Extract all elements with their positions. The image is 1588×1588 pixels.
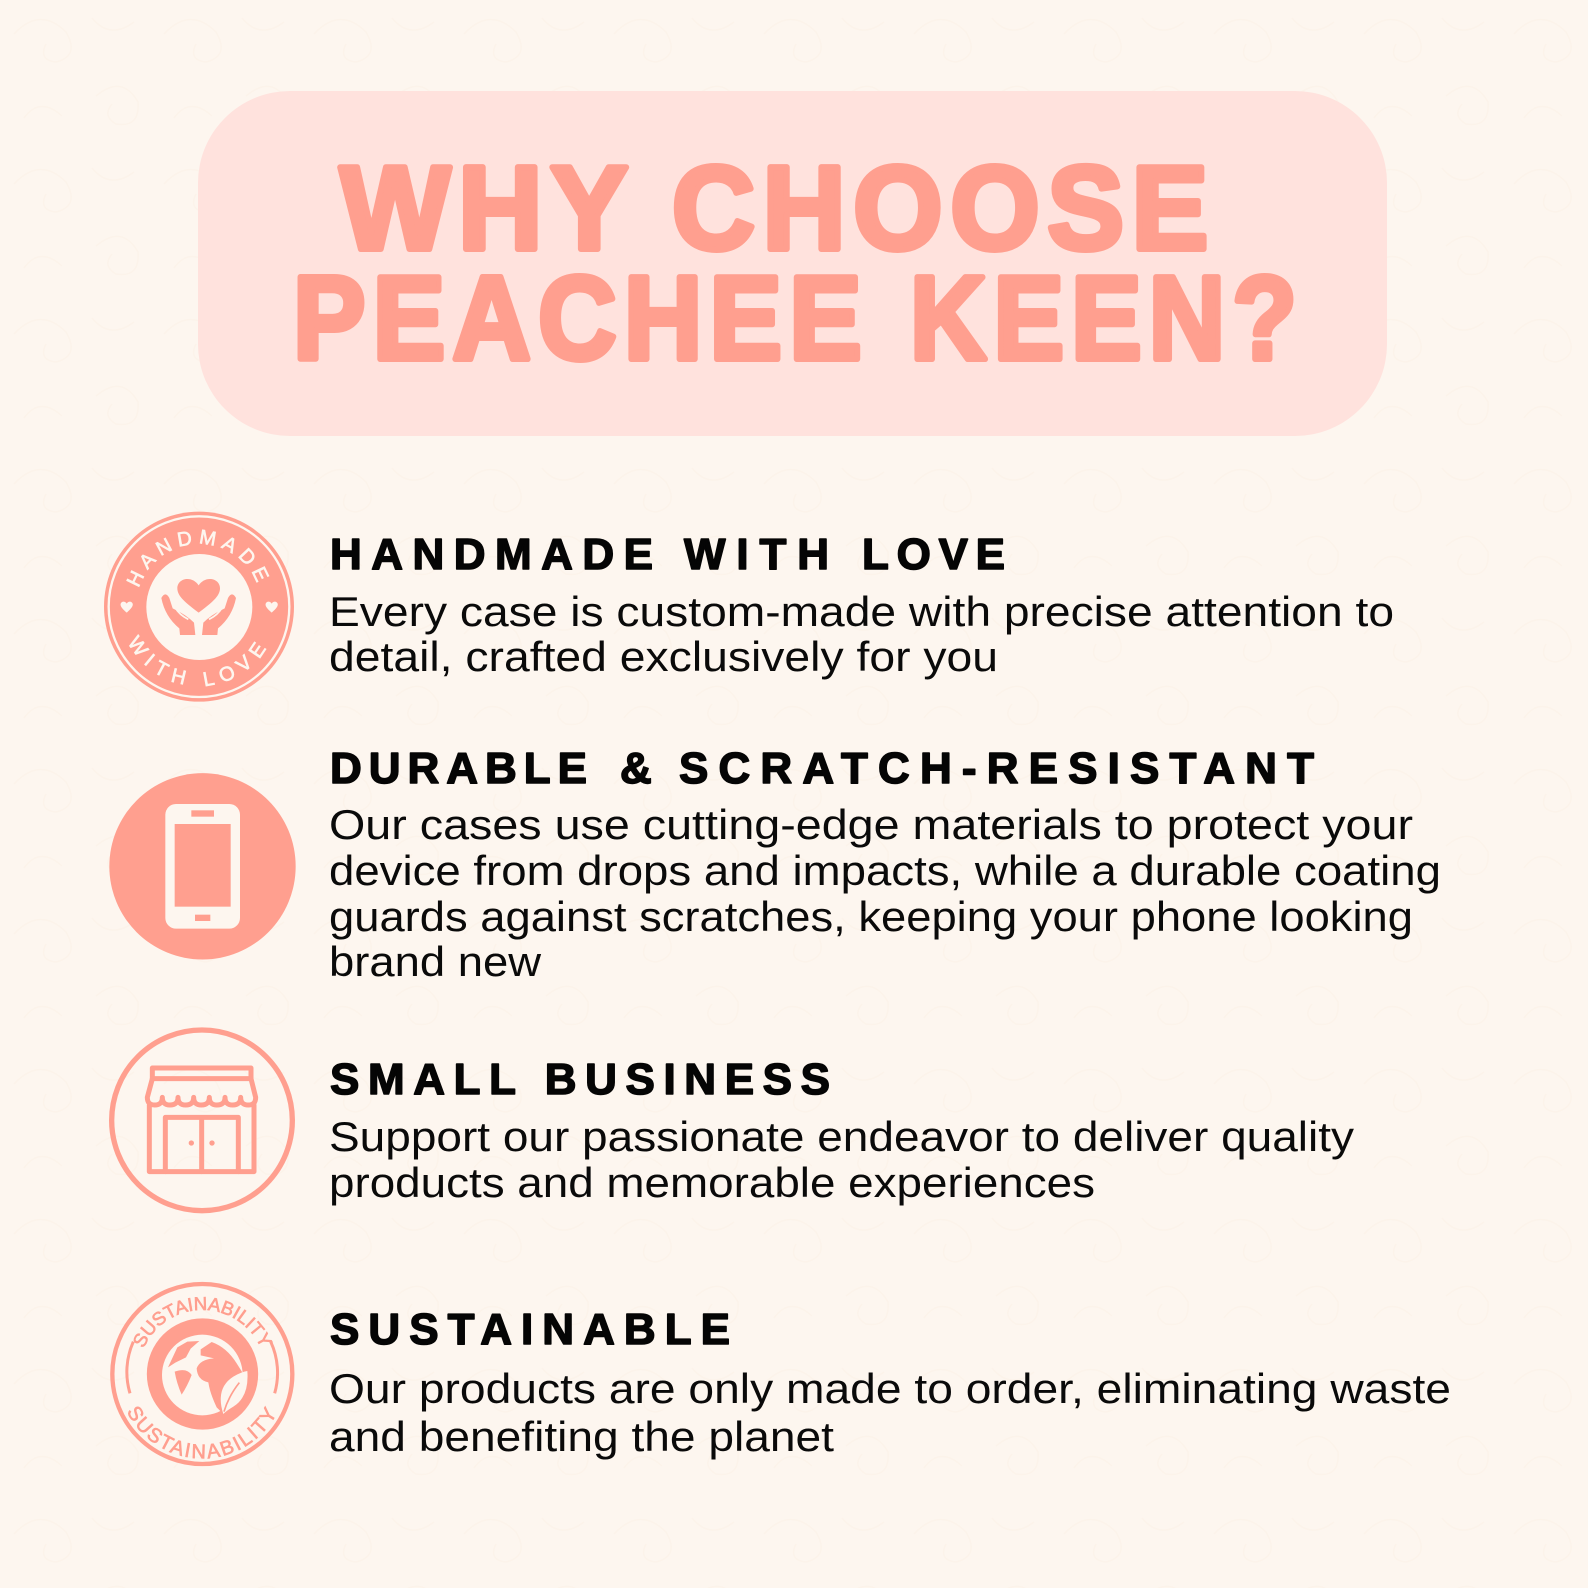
- text: durable description: [329, 801, 1441, 985]
- title banner: [198, 91, 1387, 436]
- text: durable description: Our cases use cutting-edge materials to protect your: [329, 801, 1413, 848]
- heading: durable and scratch-resistant: &: [620, 744, 652, 793]
- heading: handmade with love: LOVE: [862, 530, 1005, 579]
- item: durable and scratch-resistant: [329, 744, 1441, 985]
- item: handmade with love: [329, 530, 1394, 680]
- text: sustainable description: Our products are only made to order, eliminating waste: [329, 1365, 1451, 1412]
- heading: durable and scratch-resistant: [330, 744, 1314, 793]
- text: handmade description: Every case is custom-made with precise attention to: [329, 588, 1394, 635]
- icon: handmade with love badge: WITH LOVE: [129, 634, 266, 686]
- text: handmade description: [329, 588, 1394, 680]
- text: durable description: brand new: [329, 938, 542, 985]
- text: durable description: device from drops and impacts, while a durable coating: [329, 847, 1441, 894]
- icon: handmade with love badge: [104, 512, 294, 702]
- text: small business description: Support our passionate endeavor to deliver quality: [329, 1113, 1354, 1160]
- title: why choose peachee keen: WHY: [340, 142, 636, 275]
- icon: storefront: [112, 1030, 292, 1211]
- title: why choose peachee keen: CHOOSE: [672, 142, 1216, 275]
- text: handmade description: detail, crafted exclusively for you: [329, 633, 998, 680]
- icon: handmade with love badge: HANDMADE: [126, 529, 270, 588]
- item: sustainable: [329, 1305, 1451, 1460]
- text: sustainable description: and benefiting the planet: [329, 1413, 834, 1460]
- heading: sustainable: SUSTAINABLE: [330, 1305, 730, 1354]
- title: why choose peachee keen: PEACHEE: [293, 252, 869, 385]
- icon: sustainability globe badge: SUSTAINABILITY: [128, 1406, 275, 1459]
- title: why choose peachee keen: KEEN?: [910, 252, 1304, 385]
- text: sustainable description: [329, 1365, 1451, 1460]
- heading: handmade with love: HANDMADE: [330, 530, 653, 579]
- heading: small business: SMALL BUSINESS: [330, 1055, 830, 1104]
- title: why choose peachee keen: [293, 142, 1304, 385]
- icon: sustainability globe badge: SUSTAINABILITY: [134, 1296, 273, 1347]
- heading: durable and scratch-resistant: SCRATCH-RESISTANT: [679, 744, 1314, 793]
- icon: sustainability globe badge: [110, 1282, 294, 1466]
- item: small business: [329, 1055, 1354, 1206]
- text: small business description: products and memorable experiences: [329, 1159, 1095, 1206]
- icon: phone: [109, 773, 296, 959]
- heading: handmade with love: [330, 530, 1005, 579]
- text: small business description: [329, 1113, 1354, 1206]
- heading: handmade with love: WITH: [684, 530, 829, 579]
- text: durable description: guards against scratches, keeping your phone looking: [329, 893, 1413, 940]
- heading: durable and scratch-resistant: DURABLE: [330, 744, 587, 793]
